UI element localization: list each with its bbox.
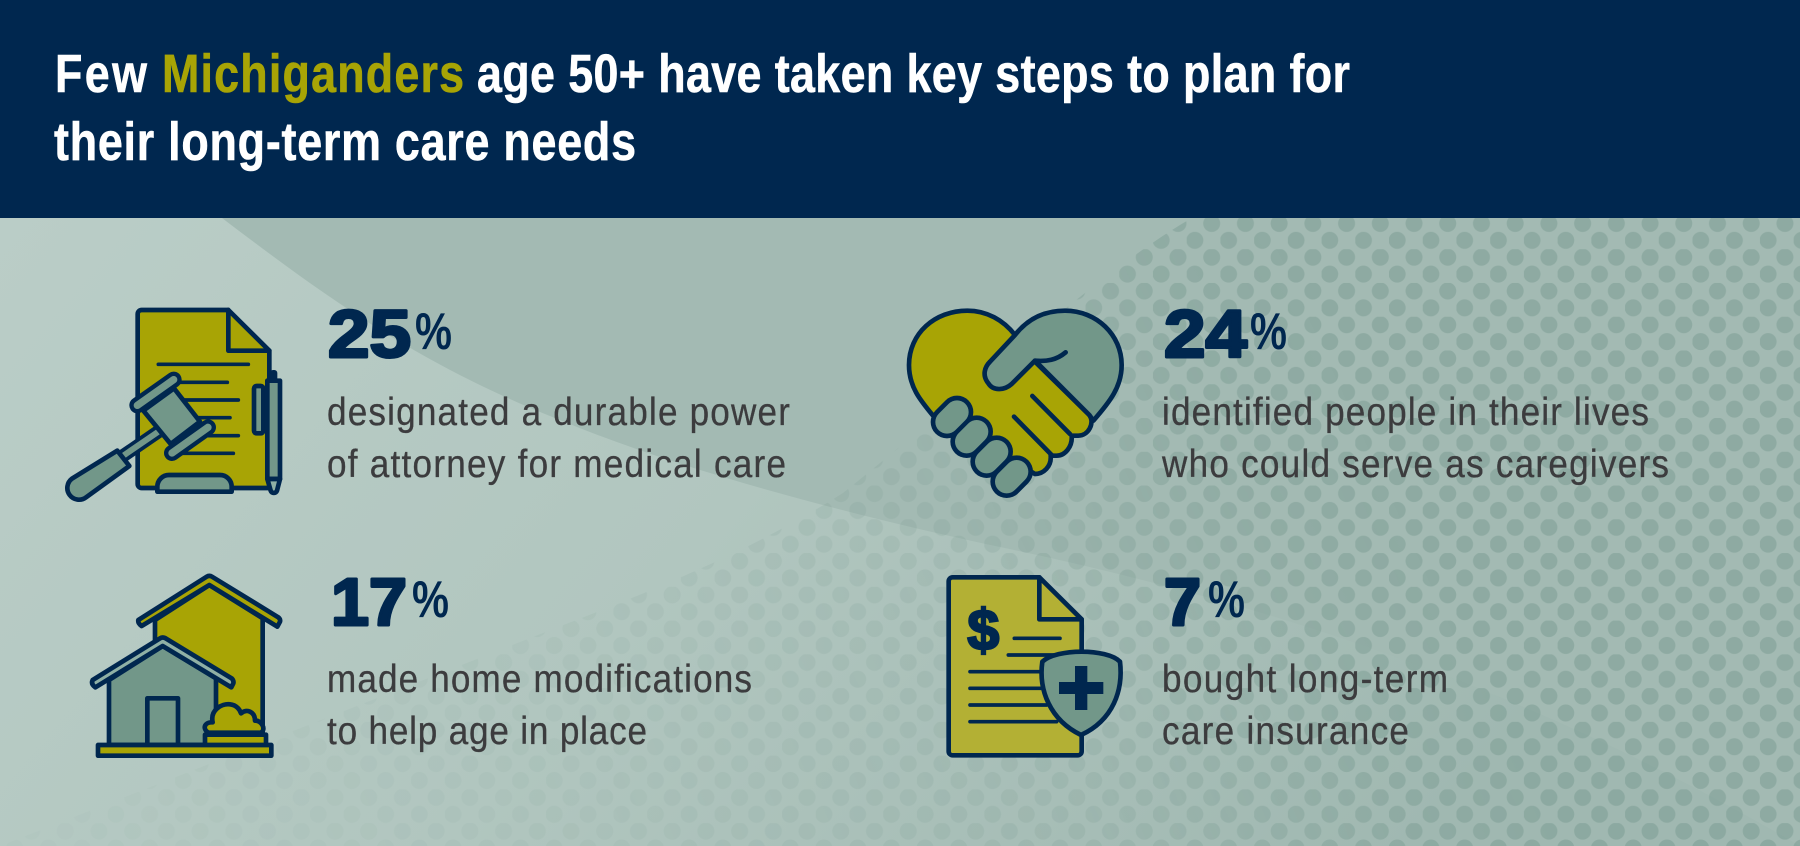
stat: 24%: identified people in their lives [1162,389,1649,433]
stat: 17% [327,565,752,752]
header band [0,0,1800,218]
icon: handshake heart [909,311,1122,482]
title: their long-term care needs [54,111,636,172]
stat: 24%: % [1250,303,1287,361]
icon: document and gavel [67,310,280,500]
icon: houses [92,576,280,756]
stat: 7%: bought long-term [1162,656,1448,700]
stat: 17%: % [412,571,449,629]
background panel [181,218,1800,846]
title: Few [55,43,147,104]
stat: 7% [1162,565,1448,752]
stat: 7%: care insurance [1162,708,1409,752]
stat: 25%: % [415,303,452,361]
icon: insurance document with shield: $ [967,598,999,662]
title: age 50+ have taken key steps to plan for [477,43,1350,104]
stat: 24% [1161,297,1669,485]
stat: 25% [327,297,790,485]
stat: 17%: to help age in place [327,708,647,752]
icon: insurance document with shield [949,577,1121,755]
stat: 7%: 7 [1164,565,1201,640]
title [54,43,1350,172]
stat: 24%: who could serve as caregivers [1161,441,1669,485]
stat: 7%: % [1208,571,1245,629]
stat: 25%: 25 [328,297,411,372]
stat: 25%: designated a durable power [327,389,790,433]
stat: 17%: made home modifications [327,656,752,700]
stat: 25%: of attorney for medical care [327,441,786,485]
stat: 24%: 24 [1164,297,1247,372]
stat: 17%: 17 [331,565,407,640]
title: Michiganders [162,43,464,104]
